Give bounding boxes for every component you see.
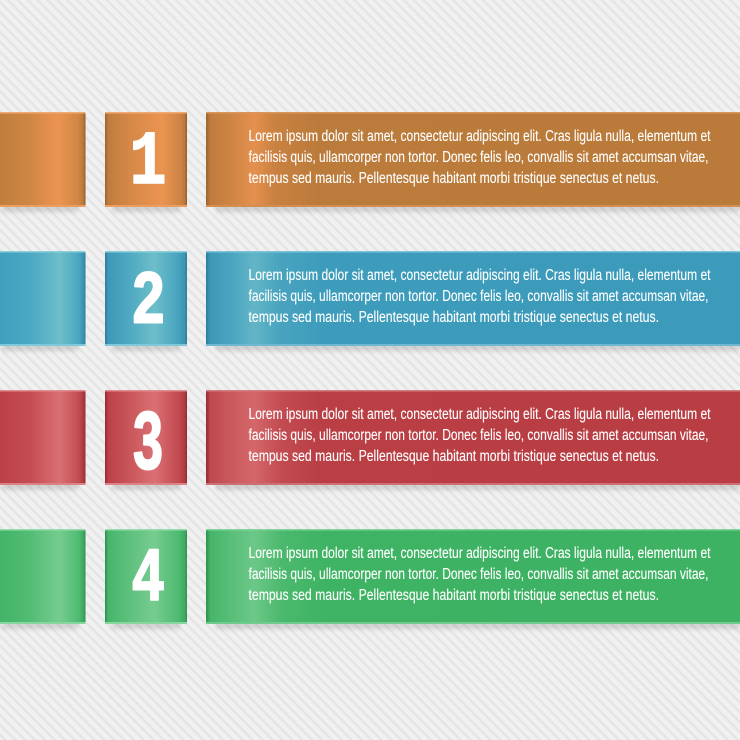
text band 1 [206, 112, 740, 207]
number box 2 [105, 251, 187, 346]
text band 3 [206, 390, 740, 485]
ribbon row 3: red [0, 390, 740, 490]
ribbon row 4: green [0, 529, 740, 629]
number box 3 [105, 390, 187, 486]
ribbon row 1: orange [0, 112, 740, 212]
left ribbon segment [0, 251, 86, 346]
number box 1 [105, 112, 187, 207]
left ribbon segment [0, 529, 86, 624]
left ribbon segment [0, 390, 86, 485]
ribbon row 2: blue [0, 251, 740, 351]
number box 3: 3 [133, 396, 163, 486]
number box 1: 1 [130, 120, 166, 206]
text band 2 [206, 251, 740, 346]
number box 2: 2 [132, 258, 164, 338]
number box 4: 4 [132, 536, 164, 616]
number box 4 [105, 529, 187, 624]
left ribbon segment [0, 112, 86, 207]
text band 4 [206, 529, 740, 624]
